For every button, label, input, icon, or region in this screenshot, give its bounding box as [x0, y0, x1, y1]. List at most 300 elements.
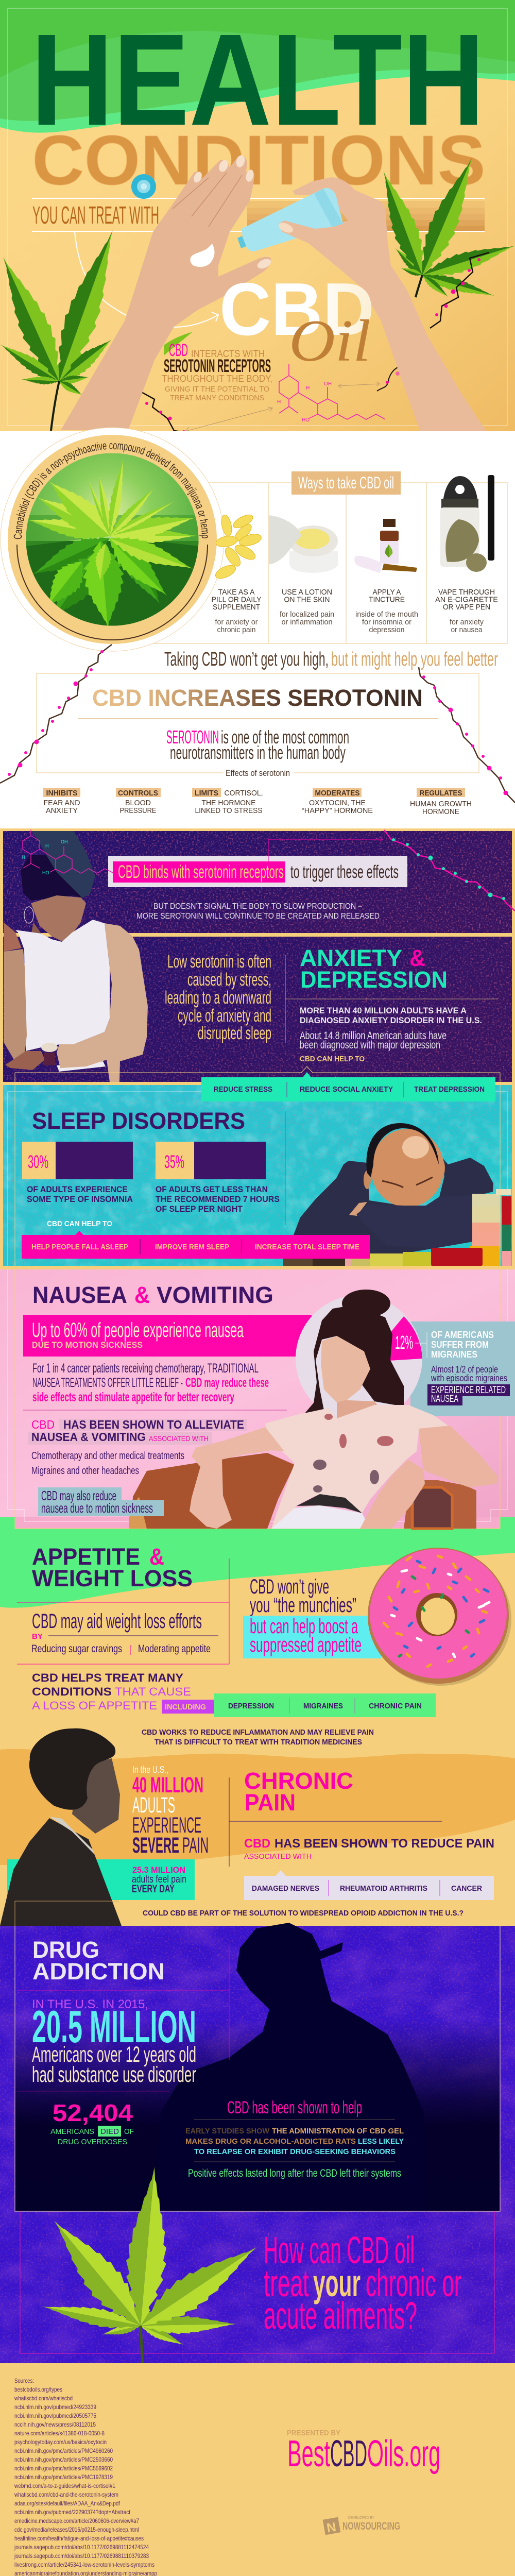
effect: controls: BLOOD — [125, 799, 151, 807]
text: method 1: PILL OR DAILY — [211, 596, 262, 604]
helix right — [419, 667, 515, 803]
heading: ways to take: Ways to take CBD oil — [298, 473, 394, 492]
text: 40 million adults: PAIN — [182, 1833, 209, 1858]
text: method 3: TINCTURE — [369, 596, 405, 604]
callout: migraines — [395, 1330, 510, 1405]
teal stat box — [7, 1859, 195, 1900]
background: green and yellow lower — [0, 1517, 515, 1927]
text: serotonin definition: neurotransmitters in the human body — [170, 742, 346, 763]
stat: 52,404: OF — [124, 2127, 134, 2136]
sources list: ncbi.nlm.nih.gov/pubmed/22290374?dopt=Abstract — [14, 2509, 131, 2516]
bar: sleep benefits: HELP PEOPLE FALL ASLEEP — [31, 1243, 128, 1251]
effect: inhibits: INHIBITS — [46, 789, 77, 798]
icon: cannabis leaf left — [0, 225, 128, 431]
effect: regulates: REGULATES — [419, 789, 462, 798]
callout: boost appetite: but can help boost a — [250, 1615, 358, 1638]
heading: chronic pain — [244, 1768, 353, 1816]
text: anxiety stats: About 14.8 million American adults have — [300, 1030, 447, 1042]
text: method 1: for anxiety or — [215, 618, 258, 626]
effect: inhibits: ANXIETY — [46, 806, 78, 815]
callout: boost appetite: suppressed appetite — [250, 1634, 362, 1656]
stat: 20.5 million — [32, 1997, 196, 2087]
developer logo: NOWSOURCING — [342, 2520, 400, 2532]
heading: chronic pain: PAIN — [245, 1789, 296, 1816]
frame — [20, 2211, 494, 2353]
text: inflammation — [142, 1728, 374, 1747]
effect: controls — [116, 788, 161, 815]
sponsor logo: PRESENTED BY — [287, 2429, 340, 2437]
callout: migraines: NAUSEA — [431, 1394, 458, 1404]
text: CBD interacts: TREAT MANY CONDITIONS — [170, 394, 264, 402]
text: 40 million adults: 40 MILLION — [132, 1773, 203, 1798]
stat: 35 percent: 35% — [164, 1152, 184, 1172]
effect: inhibits — [43, 788, 80, 815]
helix — [384, 830, 515, 911]
heading: nausea and vomiting — [32, 1282, 273, 1308]
text: CBD shown to help: TO RELAPSE OR EXHIBIT DRUG-SEEKING BEHAVIORS — [194, 2147, 396, 2156]
callout: motion sickness: CBD may also reduce — [41, 1488, 116, 1503]
bar: conditions: INCLUDING — [165, 1703, 206, 1711]
banner: motion sickness: Up to 60% of people experience nausea — [32, 1319, 244, 1342]
effect: moderates: MODERATES — [315, 789, 359, 798]
text: serotonin definition: SEROTONIN — [166, 726, 219, 748]
panel: hero header: SEROTONIN RECEPTORS — [164, 356, 271, 376]
text: 40 million adults: adults feel pain — [132, 1874, 186, 1885]
sources list: nature.com/articles/s41386-018-0050-8 — [14, 2430, 105, 2437]
developer logo — [323, 2516, 400, 2535]
text: low serotonin — [165, 952, 271, 1043]
orange wave — [0, 1749, 515, 1865]
stat: 20.5 million: Americans over 12 years old — [32, 2042, 196, 2067]
callout: migraines: SUFFER FROM — [431, 1340, 489, 1350]
text: weight loss: Moderating appetite — [138, 1643, 211, 1655]
sources list: nccih.nih.gov/news/press/08112015 — [14, 2421, 96, 2428]
text: method 3: APPLY A — [373, 588, 401, 597]
text: reduce pain: HAS BEEN SHOWN TO REDUCE PAIN — [274, 1837, 494, 1851]
icon: bottle cap — [131, 174, 156, 199]
panel: chronic pain — [0, 1728, 515, 1927]
effect: inhibits: FEAR AND — [43, 799, 80, 807]
panel: footer — [0, 2363, 515, 2576]
panel: hero header: YOU CAN TREAT WITH — [32, 202, 159, 229]
text: cbd can help to: CBD CAN HELP TO — [47, 1219, 112, 1228]
text: CBD shown to help — [185, 2098, 404, 2179]
icon: cannabis leaf right — [371, 152, 515, 302]
illustration: hand left with cream — [61, 154, 272, 430]
effect: limits: LINKED TO STRESS — [195, 806, 263, 815]
bar: anxiety benefits: REDUCE STRESS — [214, 1085, 272, 1094]
effect: moderates: OXYTOCIN, THE — [309, 799, 366, 807]
banner: motion sickness: DUE TO MOTION SICKNESS — [32, 1340, 143, 1350]
stat: 30 percent: OF ADULTS EXPERIENCE — [27, 1184, 128, 1194]
icon: CBD molecule: H — [277, 399, 281, 405]
sources list: ncbi.nlm.nih.gov/pmc/articles/PMC4960260 — [14, 2447, 113, 2454]
bar: sleep benefits: INCREASE TOTAL SLEEP TIME — [255, 1243, 359, 1251]
callout box — [108, 856, 407, 887]
text: low serotonin: Low serotonin is often — [167, 952, 271, 972]
green wave — [0, 0, 515, 133]
heading: appetite and weight loss: WEIGHT LOSS — [32, 1565, 193, 1591]
icon: CBD molecule: OH — [324, 381, 332, 387]
bar: conditions: DEPRESSION — [228, 1702, 274, 1710]
heading: appetite and weight loss: & — [149, 1544, 164, 1570]
effect: controls: CONTROLS — [118, 789, 158, 798]
sources list: livestrong.com/article/245341-low-serotonin-levels-symptoms — [14, 2561, 154, 2568]
text: method 2 — [280, 588, 334, 626]
arrows — [185, 382, 380, 432]
arrow — [268, 837, 383, 861]
sources list: healthline.com/health/fatigue-and-loss-of-appetite#causes — [14, 2535, 144, 2542]
circular caption: Cannabidiol (CBD) is a non-psychoactive compound derived from marijuana or hemp — [13, 442, 208, 539]
icon: small leaf — [164, 332, 193, 355]
text: munchies — [250, 1575, 356, 1617]
migraine box background — [410, 1321, 515, 1416]
text: CBD alleviate: NAUSEA & VOMITING — [31, 1430, 146, 1444]
text: CBD interacts: CBD — [169, 341, 188, 360]
text: weight loss: BY — [32, 1632, 43, 1641]
heading: nausea and vomiting: NAUSEA — [32, 1282, 127, 1308]
sources list: webmd.com/a-to-z-guides/what-is-cortisol#1 — [14, 2482, 115, 2489]
effect: regulates: HORMONE — [422, 807, 459, 816]
text: chemotherapy: NAUSEA TREATMENTS OFFER LITTLE RELIEF - — [32, 1376, 183, 1390]
sponsor logo: Best — [287, 2433, 330, 2475]
illustration: sleeping man — [283, 1123, 511, 1266]
text: method 4: VAPE THROUGH — [438, 588, 495, 597]
callout: motion sickness: nausea due to motion sickness — [41, 1500, 153, 1516]
heading: anxiety and depression — [300, 945, 448, 993]
icon: cream — [191, 244, 214, 267]
text: anxiety stats: CBD CAN HELP TO — [300, 1055, 365, 1063]
text: CBD interacts: GIVING IT THE POTENTIAL TO — [165, 385, 269, 394]
stat: 35 percent: OF ADULTS GET LESS THAN — [156, 1184, 268, 1194]
text: method 2: ON THE SKIN — [284, 596, 330, 604]
icon: donut — [368, 1548, 511, 1686]
text: CBD interacts: THROUGHOUT THE BODY, — [162, 374, 272, 384]
text: 40 million adults: EVERY DAY — [132, 1883, 175, 1895]
sources list: ncbi.nlm.nih.gov/pmc/articles/PMC5569602 — [14, 2465, 113, 2472]
icon: cannabis leaf bottom — [40, 2165, 267, 2363]
heading: nausea and vomiting: VOMITING — [157, 1282, 273, 1308]
icon: molecule: H — [22, 855, 25, 860]
text: munchies: you “the munchies” — [250, 1594, 356, 1617]
sources list: adaa.org/sites/default/files/ADAA_Anx&Dep.pdf — [14, 2500, 121, 2507]
bar: conditions: CHRONIC PAIN — [369, 1702, 422, 1710]
panel: appetite and weight loss — [17, 1544, 511, 1717]
stat: 52,404 — [50, 2099, 134, 2146]
call to action: treat — [264, 2262, 309, 2304]
sources list — [14, 2377, 279, 2576]
text: anxiety stats: MORE THAN 40 MILLION ADULTS HAVE A — [300, 1006, 467, 1015]
frame — [8, 8, 507, 426]
title: CONDITIONS: CONDITIONS — [32, 121, 486, 200]
text: 40 million adults: In the U.S., — [132, 1765, 168, 1775]
stat: 52,404: 52,404 — [53, 2099, 133, 2126]
text: method 2: or inflammation — [281, 618, 333, 626]
text: method 4: for anxiety — [450, 618, 484, 626]
text: CBD interacts: INTERACTS WITH — [191, 349, 265, 360]
text: CBD shown to help: EARLY STUDIES SHOW — [185, 2127, 270, 2136]
bar: anxiety benefits: REDUCE SOCIAL ANXIETY — [300, 1085, 393, 1094]
stat: 20.5 million: 20.5 MILLION — [32, 2001, 196, 2052]
illustration: woman in cardigan — [4, 831, 148, 1082]
sources list: whatiscbd.com/whatiscbd — [14, 2395, 73, 2402]
sources list: ncbi.nlm.nih.gov/pubmed/24923339 — [14, 2403, 96, 2411]
stat: 52,404: DIED — [100, 2127, 119, 2136]
text: serotonin production — [136, 902, 380, 921]
panel: hero header — [0, 0, 515, 440]
text: chemotherapy — [32, 1361, 269, 1404]
sources list: emedicine.medscape.com/article/2060606-overview#a7 — [14, 2517, 139, 2524]
heading: ways to take — [291, 471, 401, 495]
photo: hemp plant — [26, 453, 199, 630]
text: inflammation: CBD WORKS TO REDUCE INFLAMMATION AND MAY RELIEVE PAIN — [142, 1728, 374, 1737]
text: CBD alleviate: ASSOCIATED WITH — [149, 1434, 209, 1443]
bar: pain types: DAMAGED NERVES — [252, 1884, 319, 1893]
heading: drug addiction: ADDICTION — [32, 1958, 165, 1985]
icon: vape and jar — [440, 475, 494, 572]
text: CBD alleviate — [28, 1418, 247, 1445]
text: low serotonin: cycle of anxiety and — [178, 1006, 271, 1026]
text: weight loss — [31, 1610, 218, 1655]
text: anxiety stats: DIAGNOSED ANXIETY DISORDER IN THE U.S. — [300, 1015, 482, 1025]
sources list: psychologytoday.com/us/basics/oxytocin — [14, 2438, 107, 2446]
text: CBD shown to help: THE ADMINISTRATION OF CBD GEL — [272, 2127, 404, 2136]
helix left — [140, 391, 185, 440]
desk objects — [283, 1189, 511, 1266]
text: CBD shown to help: Positive effects lasted long after the CBD left their systems — [188, 2167, 401, 2179]
stat: 35 percent — [156, 1142, 280, 1214]
sources list: journals.sagepub.com/doi/abs/10.1177/0269881110379283 — [14, 2552, 149, 2560]
text: CBD alleviate: HAS BEEN SHOWN TO ALLEVIATE — [63, 1418, 244, 1431]
icon: tube — [237, 188, 343, 251]
icon: CBD molecule: HO — [302, 417, 310, 423]
text: method 1: TAKE AS A — [218, 588, 254, 597]
stat: 20.5 million: had substance use disorder — [32, 2062, 196, 2087]
text: serotonin production: MORE SEROTONIN WILL CONTINUE TO BE CREATED AND RELEASED — [136, 912, 380, 921]
icon: pills — [214, 512, 263, 581]
text: weight loss: Reducing sugar cravings — [31, 1643, 122, 1655]
icon: lotion jar — [269, 515, 338, 573]
effect: limits: LIMITS — [195, 789, 218, 798]
text: anxiety stats: been diagnosed with major depression — [300, 1039, 440, 1051]
heading: appetite and weight loss: APPETITE — [32, 1544, 140, 1570]
bar: sleep benefits: IMPROVE REM SLEEP — [155, 1243, 229, 1251]
icon: CBD molecule — [277, 364, 385, 423]
callout: motion sickness — [38, 1487, 164, 1516]
callout: boost appetite — [243, 1615, 381, 1658]
sources list: Sources: — [14, 2377, 34, 2384]
plate with photo — [0, 428, 225, 651]
stat: 35 percent: OF SLEEP PER NIGHT — [156, 1204, 243, 1214]
developer logo: DEVELOPED BY — [348, 2516, 374, 2520]
banner: motion sickness — [23, 1315, 312, 1357]
text: CBD shown to help: CBD has been shown to help — [227, 2098, 362, 2117]
text: method 3: inside of the mouth — [355, 610, 418, 619]
text: method 4: AN E-CIGARETTE — [435, 596, 498, 604]
text: 40 million adults — [132, 1765, 209, 1895]
icon: CBD molecule: H — [306, 385, 310, 391]
text: method 1 — [211, 588, 262, 634]
curved arrow to CBD — [75, 232, 218, 328]
text: method 3: for insomnia or — [362, 618, 411, 626]
text: 40 million adults: SEVERE — [132, 1833, 179, 1858]
illustration: man profile — [0, 1728, 122, 1926]
text: method 1: SUPPLEMENT — [213, 603, 260, 612]
callout: migraines: MIGRAINES — [431, 1349, 477, 1360]
sources list: ncbi.nlm.nih.gov/pubmed/20505775 — [14, 2412, 96, 2419]
text: chemotherapy: CBD may reduce these — [185, 1376, 269, 1390]
sources list: cdc.gov/media/releases/2016/p0215-enough-sleep.html — [14, 2526, 139, 2533]
effect: controls: PRESSURE — [119, 806, 157, 815]
stat: 30 percent — [22, 1142, 133, 1204]
text: chemotherapy: side effects and stimulate appetite for better recovery — [32, 1390, 234, 1404]
bar: conditions: MIGRAINES — [303, 1702, 343, 1710]
heading: anxiety and depression: ANXIETY — [300, 945, 402, 971]
stat: 30 percent: 30% — [28, 1152, 48, 1172]
sources list: journals.sagepub.com/doi/abs/10.1177/0269881112474524 — [14, 2544, 149, 2551]
icon: molecule: H — [45, 843, 48, 849]
panel: chronic pain: ASSOCIATED WITH — [244, 1852, 312, 1861]
panel: what is CBD — [0, 428, 515, 828]
stat: 52,404: AMERICANS — [50, 2127, 94, 2136]
heading: drug addiction — [32, 1937, 165, 1985]
text: 40 million adults: 25.3 MILLION — [132, 1865, 185, 1875]
title: CBD: CBD — [219, 267, 374, 351]
text: method 4: OR VAPE PEN — [443, 603, 490, 612]
text: low serotonin: caused by stress, — [187, 970, 271, 990]
text: serotonin production: BUT DOESN’T SIGNAL THE BODY TO SLOW PRODUCTION – — [153, 902, 362, 911]
heading: nausea and vomiting: & — [134, 1282, 150, 1308]
bar: anxiety benefits: TREAT DEPRESSION — [414, 1085, 485, 1094]
text: anxiety stats — [300, 1006, 482, 1063]
text: inflammation: THAT IS DIFFICULT TO TREAT WITH TRADITION MEDICINES — [154, 1738, 362, 1747]
effect: limits: THE HORMONE — [202, 799, 255, 807]
text: method 3 — [355, 588, 418, 634]
heading: anxiety and depression: & — [409, 945, 425, 971]
bar: pain types: RHEUMATOID ARTHRITIS — [340, 1884, 427, 1893]
bar: pain types — [244, 1870, 494, 1900]
bar: anxiety benefits — [201, 1072, 495, 1101]
text: low serotonin: disrupted sleep — [198, 1023, 271, 1043]
text: conditions causing appetite loss: A LOSS OF APPETITE — [32, 1699, 157, 1712]
subtitle stripes — [32, 198, 485, 231]
text: chemotherapy: For 1 in 4 cancer patients receiving chemotherapy, TRADITIONAL — [32, 1361, 259, 1376]
panel: drug addiction — [0, 1923, 515, 2363]
panel frame: serotonin — [37, 673, 479, 773]
text: conditions causing appetite loss: THAT CAUSE — [115, 1685, 191, 1698]
text: CBD alleviate: CBD — [31, 1418, 55, 1431]
stat: 52,404: DRUG OVERDOSES — [58, 2138, 127, 2146]
text: CBD shown to help: LESS LIKELY — [358, 2137, 404, 2146]
heading: drug addiction: DRUG — [32, 1937, 99, 1963]
panel: sleep disorders — [3, 1085, 512, 1266]
bar: pain types: CANCER — [451, 1884, 482, 1893]
text: reduce pain: CBD — [244, 1837, 270, 1851]
sponsor logo: Oils.org — [367, 2433, 440, 2475]
helix middle — [377, 366, 402, 391]
text: CBD shown to help: MAKES DRUG OR ALCOHOL-ADDICTED RATS — [185, 2137, 356, 2146]
text: method 4: or nausea — [451, 625, 483, 634]
effect: moderates: “HAPPY” HORMONE — [302, 806, 373, 815]
text: serotonin definition: is one of the most common — [221, 726, 349, 748]
icon: molecule — [22, 829, 113, 875]
panel: nausea and vomiting — [0, 1269, 515, 1529]
text: method 4 — [435, 588, 498, 634]
label: effects: Effects of serotonin — [226, 768, 290, 778]
icon: molecule: OH — [61, 839, 68, 844]
text: low serotonin: leading to a downward — [165, 988, 271, 1008]
text: method 2: USE A LOTION — [282, 588, 332, 597]
effect: regulates — [410, 788, 472, 816]
bar: sleep benefits — [22, 1231, 370, 1259]
tagline: Taking CBD won’t get you high, — [164, 649, 329, 670]
panel: anxiety and depression — [3, 937, 512, 1082]
effect: limits: CORTISOL, — [225, 789, 263, 798]
effect: limits — [192, 788, 263, 815]
heading: anxiety and depression: DEPRESSION — [300, 967, 448, 993]
panel: CBD binds — [0, 828, 515, 1269]
developer logo: N — [325, 2520, 337, 2535]
sources list: whatiscbd.com/cbd-and-the-serotonin-system — [14, 2491, 118, 2498]
list: conditions: Chemotherapy and other medical treatments — [31, 1450, 184, 1462]
dark panel — [15, 1923, 500, 2211]
frame lines — [15, 1066, 500, 1529]
sources list: ncbi.nlm.nih.gov/pmc/articles/PMC1978319 — [14, 2473, 113, 2481]
text: method 2: for localized pain — [280, 610, 334, 619]
helix right — [430, 252, 489, 328]
illustration: woman in chair — [129, 1290, 499, 1529]
text: munchies: CBD won’t give — [250, 1575, 329, 1598]
heading: appetite and weight loss — [32, 1544, 193, 1591]
panel: ways to take CBD — [153, 471, 507, 643]
man head — [364, 1123, 445, 1207]
sources list: bestcbdoils.org/types — [14, 2386, 62, 2393]
list: conditions: Migraines and other headaches — [31, 1465, 139, 1477]
callout: migraines: Almost 1/2 of people — [431, 1364, 498, 1375]
text: conditions causing appetite loss — [32, 1671, 191, 1712]
icon: tincture bottle — [354, 519, 417, 573]
text: 40 million adults: ADULTS — [132, 1793, 175, 1818]
text: serotonin definition — [166, 726, 349, 763]
sources list: ncbi.nlm.nih.gov/pmc/articles/PMC2503660 — [14, 2456, 113, 2463]
illustration: hand right with tube — [237, 177, 486, 431]
text: CBD interacts — [162, 341, 272, 402]
helix left — [0, 645, 112, 783]
heading: chronic pain: CHRONIC — [244, 1768, 353, 1794]
callout box: to trigger these effects — [290, 862, 399, 882]
text: opioid question: COULD CBD BE PART OF THE SOLUTION TO WIDESPREAD OPIOID ADDICTION IN THE U.S.? — [143, 1909, 464, 1918]
callout: migraines: 12% — [395, 1332, 413, 1353]
text: weight loss: CBD may aid weight loss efforts — [32, 1610, 202, 1633]
title: Oil: Oil — [289, 308, 371, 374]
callout box: CBD binds with serotonin receptors — [118, 862, 284, 882]
stat: 35 percent: THE RECOMMENDED 7 HOURS — [156, 1194, 280, 1204]
sponsor logo: CBD — [330, 2433, 367, 2475]
effect: regulates: HUMAN GROWTH — [410, 800, 472, 808]
text: method 3: depression — [369, 625, 405, 634]
heading: sleep disorders: SLEEP DISORDERS — [32, 1108, 245, 1134]
callout: migraines: OF AMERICANS — [431, 1330, 494, 1340]
stat: 20.5 million: IN THE U.S. IN 2015, — [32, 1997, 148, 2011]
call to action: your — [313, 2262, 360, 2304]
text: conditions causing appetite loss: CONDITIONS — [32, 1685, 112, 1698]
bar: conditions — [162, 1693, 436, 1717]
call to action — [264, 2229, 461, 2337]
effect: moderates — [302, 788, 373, 815]
sponsor logo — [287, 2429, 440, 2475]
stat: 30 percent: SOME TYPE OF INSOMNIA — [27, 1194, 133, 1204]
text: conditions causing appetite loss: CBD HELPS TREAT MANY — [32, 1671, 183, 1684]
